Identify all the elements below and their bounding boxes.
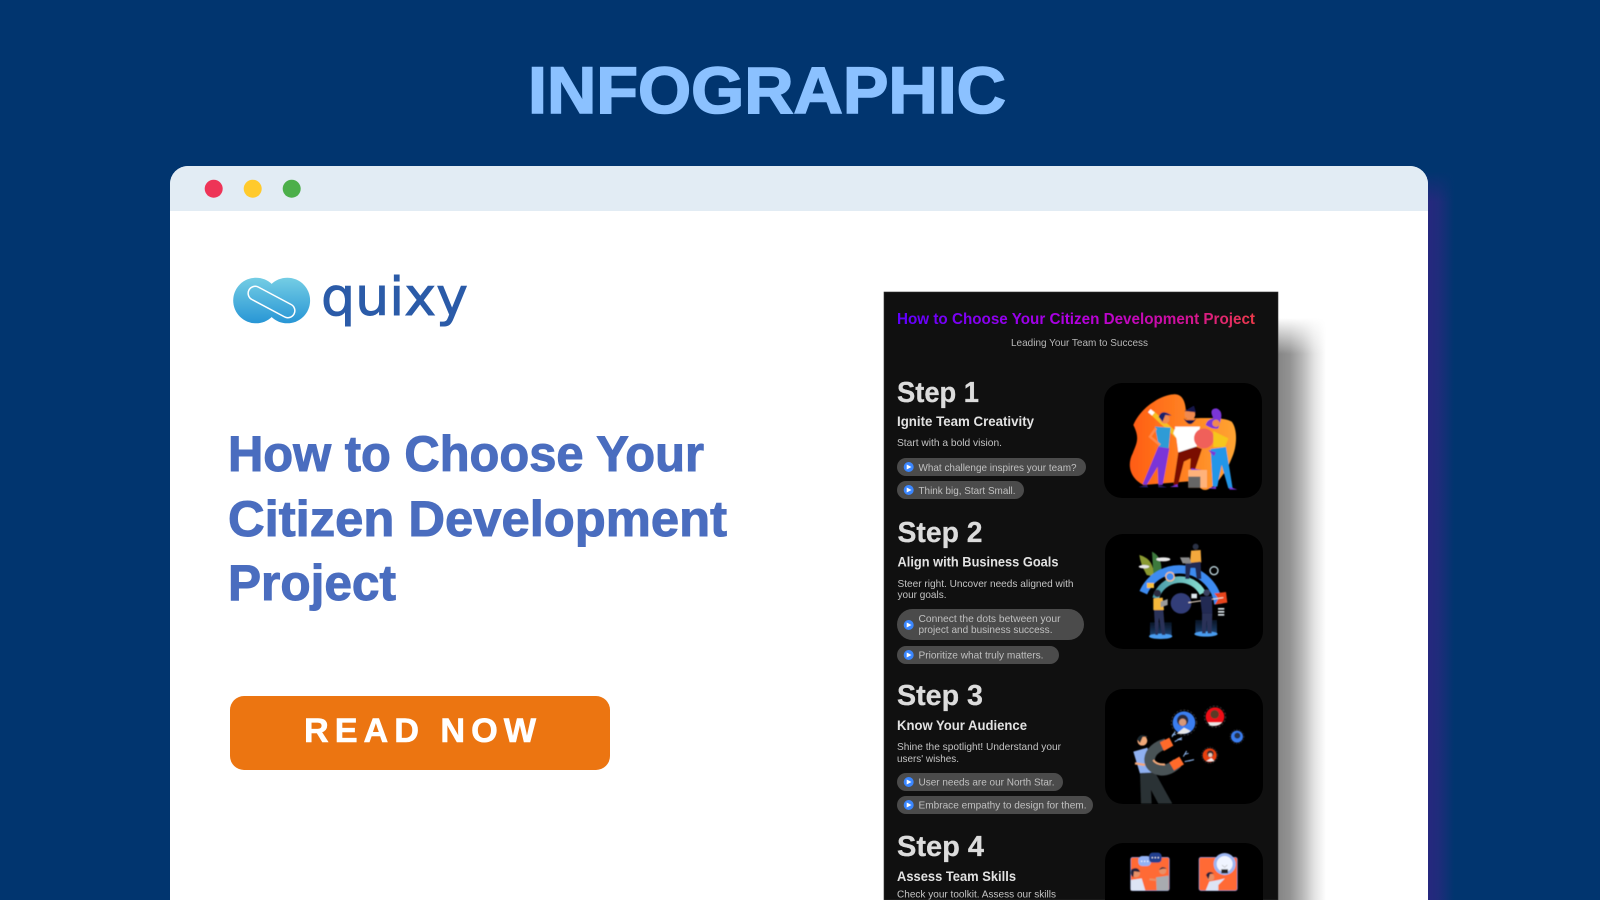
- step 4: [897, 831, 1263, 900]
- panel: dark infographic preview: [884, 292, 1278, 900]
- step 2: [897, 517, 1263, 664]
- step 1: Step 1: [897, 377, 979, 409]
- pill: connect the dots: project and business success.: [918, 624, 1052, 636]
- main heading: Project: [228, 555, 396, 611]
- step 2: Steer right. Uncover needs aligned with: [898, 578, 1074, 590]
- step 1: Ignite Team Creativity: [897, 414, 1034, 429]
- pill: prioritize: [897, 646, 1059, 664]
- title: INFOGRAPHIC: [528, 53, 1006, 127]
- pill: prioritize: Prioritize what truly matters.: [918, 650, 1044, 662]
- pill: empathy: [897, 796, 1093, 814]
- pill: connect the dots: Connect the dots between your: [918, 613, 1061, 625]
- step 1: [897, 377, 1262, 499]
- step 3: [897, 680, 1263, 814]
- illustration: business goals: [1105, 534, 1263, 649]
- logo: quixy: [233, 267, 468, 328]
- step 4: Assess Team Skills: [897, 869, 1016, 884]
- step 2: your goals.: [898, 589, 946, 601]
- illustration: magnet and audience: [1105, 689, 1263, 804]
- pill: empathy: Embrace empathy to design for them.: [918, 800, 1086, 812]
- pill: think big: [897, 481, 1024, 499]
- step 3: Know Your Audience: [897, 718, 1027, 733]
- title bar: [170, 166, 1428, 211]
- step 2: Align with Business Goals: [898, 554, 1058, 570]
- pill: connect the dots: [897, 609, 1084, 640]
- step 2: Step 2: [898, 517, 982, 549]
- button: read now: READ NOW: [304, 712, 542, 750]
- button: read now: [230, 696, 610, 770]
- illustration: team skills: [1105, 843, 1263, 900]
- step 3: Step 3: [897, 680, 983, 712]
- logo mark: [233, 278, 310, 323]
- step 1: Start with a bold vision.: [897, 437, 1002, 449]
- step 3: Shine the spotlight! Understand your: [897, 741, 1061, 753]
- step 4: Step 4: [897, 831, 984, 863]
- logo wordmark: quixy: [321, 267, 468, 328]
- main heading: How to Choose Your: [228, 426, 704, 482]
- pill: challenge: [897, 458, 1086, 476]
- pill: think big: Think big, Start Small.: [918, 485, 1016, 497]
- panel shadow: [1278, 318, 1326, 900]
- pill: challenge: What challenge inspires your team?: [918, 462, 1077, 474]
- illustration: team creativity: [1104, 383, 1262, 498]
- browser window: [170, 166, 1428, 900]
- panel title: How to Choose Your Citizen Development Project: [897, 311, 1255, 328]
- panel subtitle: Leading Your Team to Success: [1011, 337, 1148, 349]
- main heading: [228, 426, 727, 611]
- pill: north star: [897, 773, 1063, 791]
- step 3: users' wishes.: [897, 753, 959, 765]
- main heading: Citizen Development: [228, 491, 727, 547]
- window shadow: [1426, 172, 1454, 900]
- window controls: [205, 180, 301, 198]
- pill: north star: User needs are our North Star.: [918, 776, 1054, 788]
